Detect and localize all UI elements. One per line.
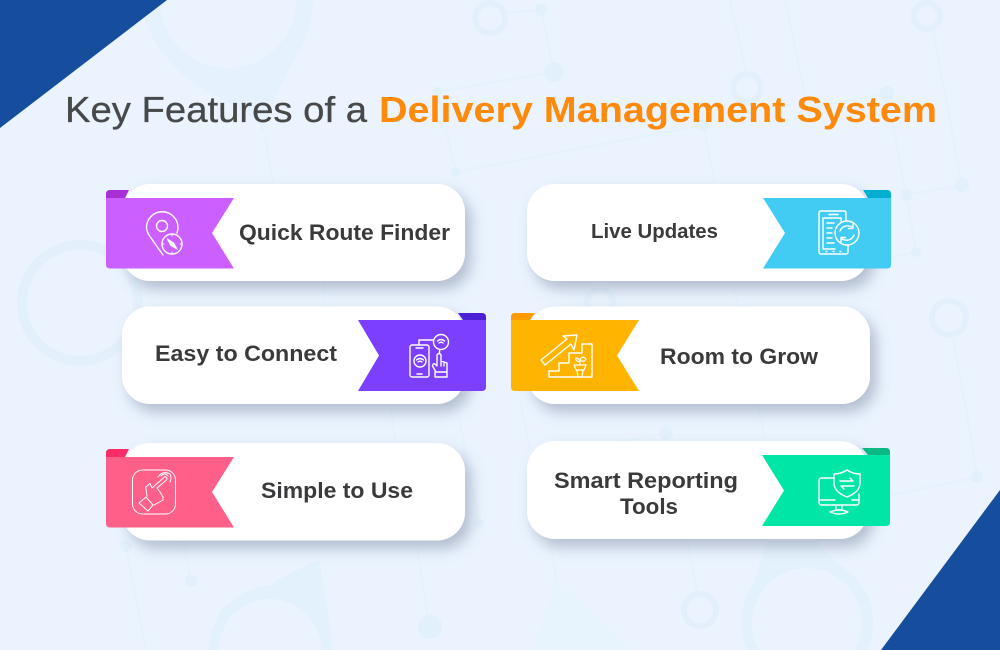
panel: Quick Route Finder bbox=[106, 184, 465, 281]
label: Room to Grow bbox=[660, 344, 819, 369]
icon: hand tapping bbox=[132, 470, 176, 514]
icon: phone with wifi and hand bbox=[410, 334, 448, 377]
panel: Live Updates bbox=[527, 184, 891, 281]
title: Key Features of a bbox=[65, 89, 368, 130]
label: Live Updates bbox=[591, 221, 718, 243]
icon: monitor with shield bbox=[819, 470, 860, 514]
icon: arrow up stairs with plant bbox=[541, 335, 592, 377]
label: Tools bbox=[620, 494, 678, 519]
title: Delivery Management System bbox=[379, 89, 937, 130]
label bbox=[554, 468, 738, 519]
label: Simple to Use bbox=[261, 478, 413, 503]
icon: location pin with compass bbox=[146, 212, 182, 255]
label: Easy to Connect bbox=[155, 341, 338, 366]
label: Smart Reporting bbox=[554, 468, 738, 493]
title bbox=[65, 89, 937, 130]
panel: Easy to Connect bbox=[122, 306, 486, 404]
panel: Smart Reporting Tools bbox=[527, 441, 890, 539]
label: Quick Route Finder bbox=[239, 220, 450, 245]
panel: Simple to Use bbox=[106, 443, 465, 540]
corner triangle top left bbox=[0, 0, 167, 128]
panel: Room to Grow bbox=[511, 306, 870, 404]
icon: tablet with refresh bbox=[819, 211, 859, 254]
corner triangle bottom right bbox=[881, 490, 1000, 650]
